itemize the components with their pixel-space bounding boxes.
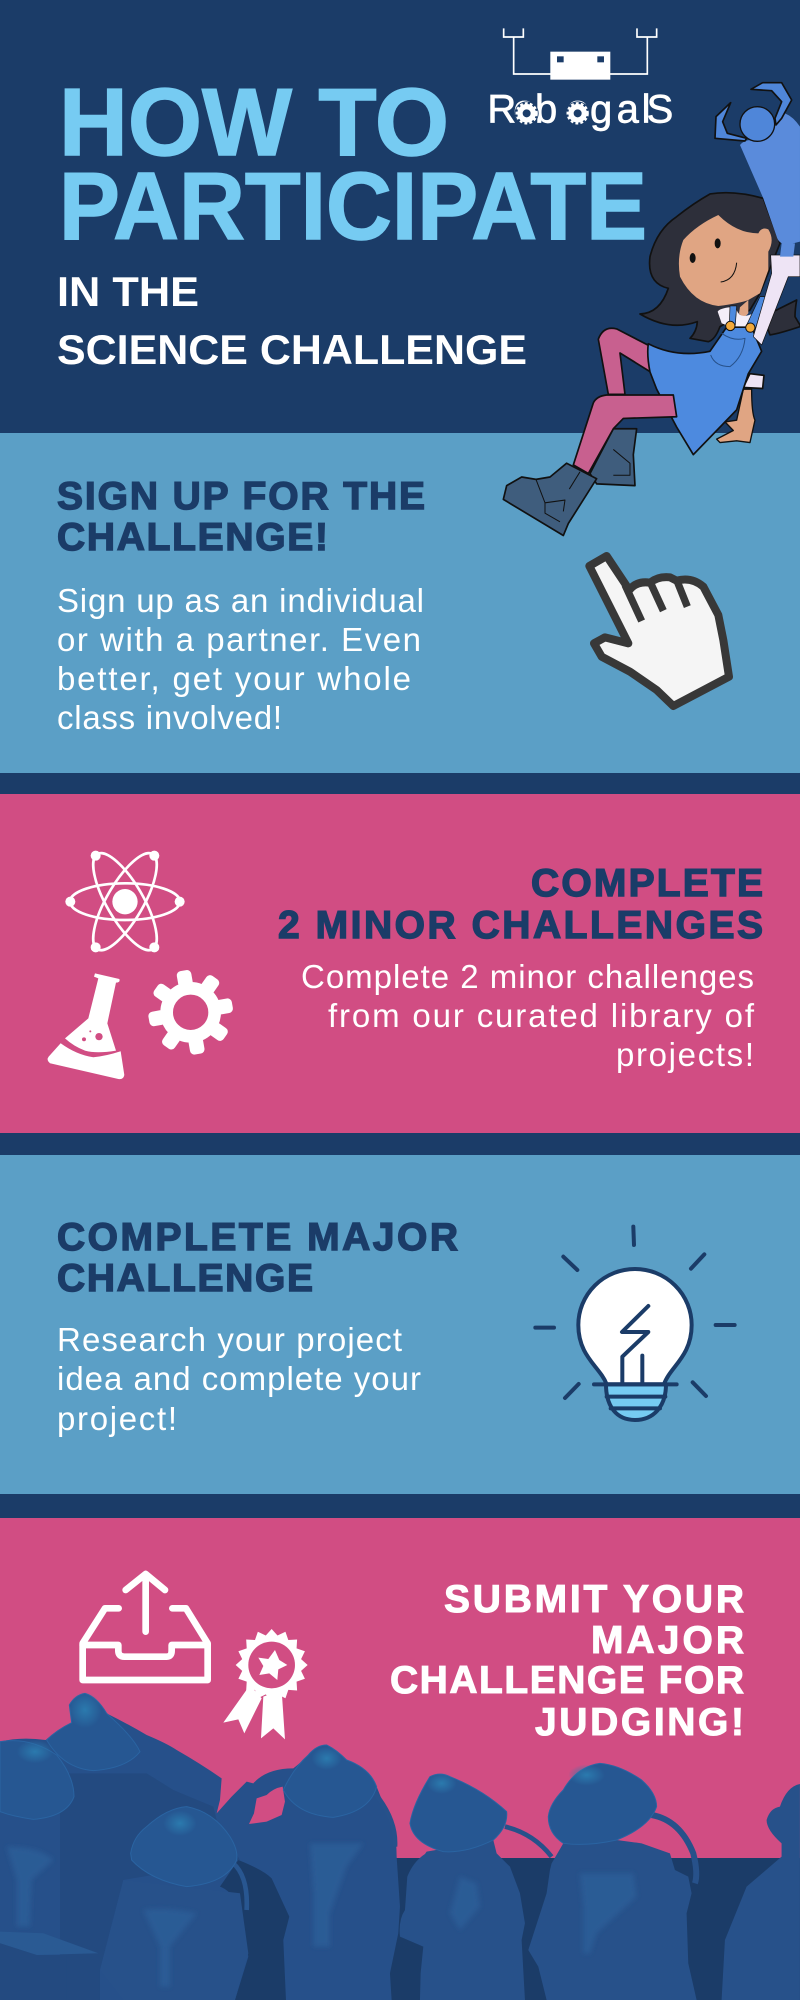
panel: sign up band [0,433,800,773]
icon: award ribbon [223,1629,308,1739]
heading: submit major challenge: MAJOR [591,1619,744,1662]
subtitle [57,268,527,373]
heading: submit major challenge: SUBMIT YOUR [444,1578,744,1621]
heading: sign up [57,475,425,559]
heading: submit major challenge: CHALLENGE FOR [390,1659,744,1702]
text: sign up description: or with a partner. Even [57,621,421,658]
text: major challenge description: Research your project [57,1321,402,1358]
heading: complete minor challenges [278,862,763,947]
heading: complete major challenge [57,1216,458,1300]
subtitle: IN THE [57,268,199,315]
logo: Robogals [487,28,673,131]
text: major challenge description [57,1321,421,1437]
icon: gear [148,969,234,1055]
heading: complete minor challenges: COMPLETE [531,862,763,905]
icon: pointing hand cursor [589,556,729,706]
icon: atom [65,845,185,958]
panel: minor challenges band [0,794,800,1133]
text: sign up description: better, get your whole [57,660,411,697]
title [59,69,647,260]
text: minor challenges description: from our curated library of [328,997,755,1034]
heading: complete major challenge: CHALLENGE [57,1257,313,1300]
text: minor challenges description [301,958,755,1073]
heading: submit major challenge [390,1578,744,1744]
panel: submit band [0,1518,800,1858]
heading: complete minor challenges: 2 MINOR CHALLENGES [278,904,763,947]
heading: submit major challenge: JUDGING! [535,1701,744,1744]
text: sign up description [57,582,424,736]
heading: complete major challenge: COMPLETE MAJOR [57,1216,458,1259]
icon: flask [48,973,124,1079]
text: sign up description: Sign up as an individual [57,582,424,619]
text: minor challenges description: projects! [616,1036,754,1073]
icon: light bulb [535,1227,735,1420]
logo: Robogals: RobogalS [487,87,673,131]
illustration: girl hanging from robot arm [503,83,800,536]
heading: sign up: SIGN UP FOR THE [57,475,425,518]
panel: major challenge band [0,1155,800,1494]
text: major challenge description: project! [57,1400,177,1437]
text: minor challenges description: Complete 2 minor challenges [301,958,754,995]
title: PARTICIPATE [59,153,647,260]
illustration: astronaut silhouettes [0,1692,800,2000]
title: HOW TO [59,69,449,176]
text: sign up description: class involved! [57,699,282,736]
heading: sign up: CHALLENGE! [57,516,328,559]
text: major challenge description: idea and complete your [57,1360,421,1397]
icon: upload tray [83,1574,208,1680]
subtitle: SCIENCE CHALLENGE [57,326,527,373]
